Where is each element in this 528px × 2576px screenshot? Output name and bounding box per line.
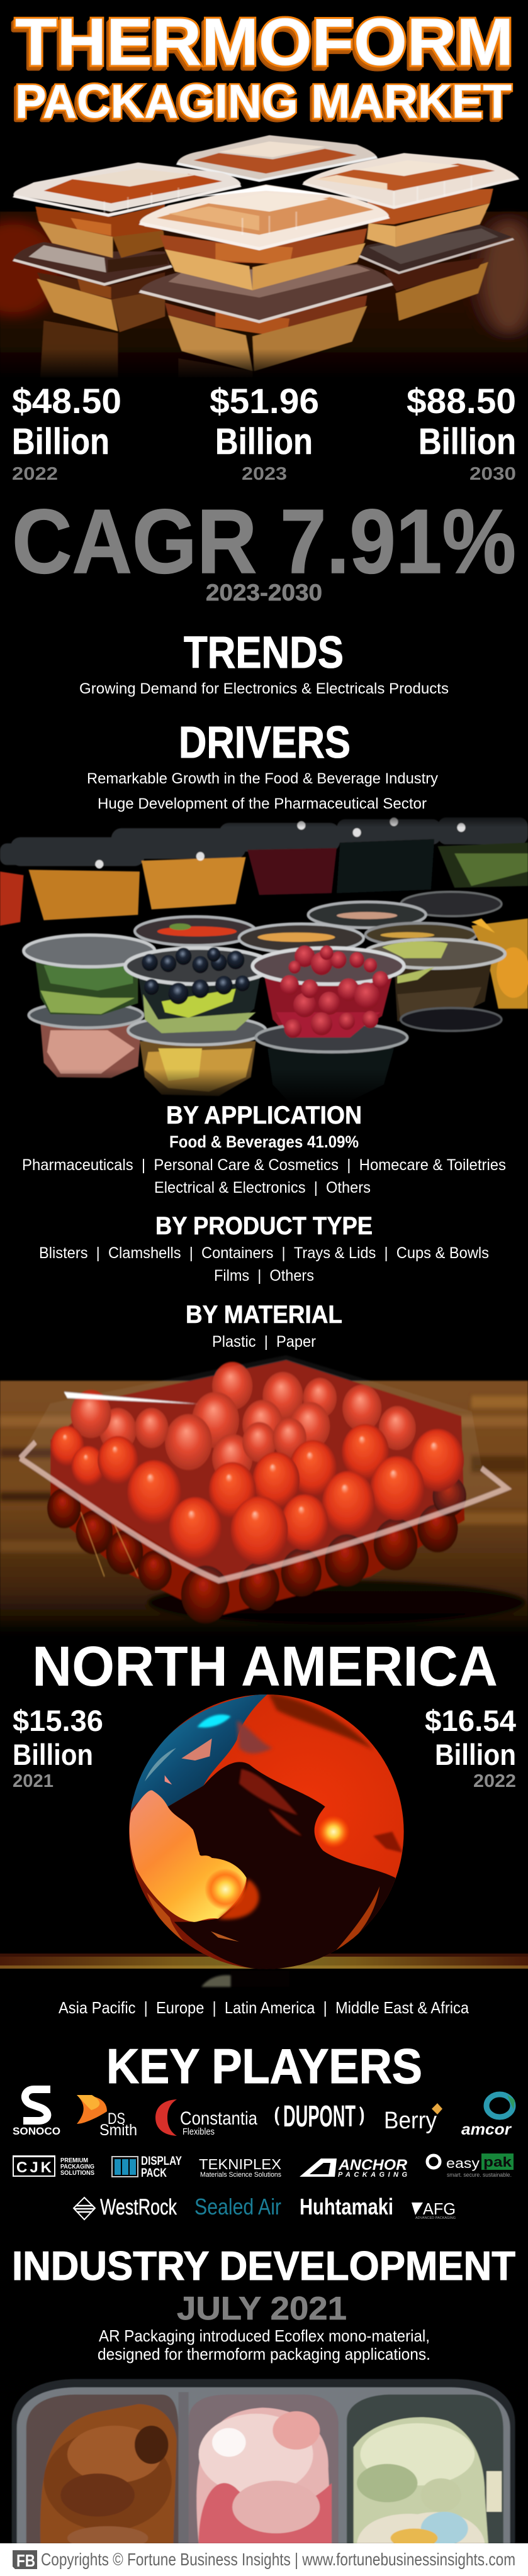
heading: industry development: INDUSTRY DEVELOPMENT — [12, 2243, 515, 2289]
logo: Display Pack: DISPLAY — [141, 2155, 182, 2168]
title line: THERMOFORM: THERMOFORM — [13, 9, 511, 83]
market value 2023: 2023 — [242, 464, 287, 484]
left lower container — [13, 242, 172, 332]
logo: Amcor: amcor — [461, 2121, 512, 2138]
market value 2022: 2022 — [12, 464, 58, 484]
logo: AFG Advanced Packaging — [412, 2199, 456, 2220]
logo: Anchor Packaging — [300, 2157, 408, 2179]
market value 2030: Billion — [418, 421, 516, 462]
logo: Easypak: easy — [446, 2155, 480, 2171]
upper dark rim — [269, 1693, 373, 1750]
logo: Berry: Berry — [384, 2108, 437, 2134]
footer bar — [0, 2543, 528, 2576]
heading: north america: NORTH AMERICA — [32, 1635, 498, 1698]
left upper container — [13, 162, 241, 258]
material list: Plastic | Paper — [212, 1333, 316, 1351]
logo: Constantia Flexibles: Constantia — [180, 2108, 257, 2129]
north america value 2021 — [13, 1704, 103, 1791]
development text: designed for thermoform packaging applications. — [98, 2345, 430, 2363]
north america value 2022: Billion — [435, 1738, 516, 1771]
drivers text — [87, 770, 438, 812]
title — [13, 5, 514, 130]
application list — [22, 1156, 506, 1197]
logo: Sonoco: SONOCO — [13, 2125, 60, 2137]
photo: thermoform cups with food — [0, 810, 528, 1104]
market value 2022 — [12, 381, 121, 484]
north america value 2021: Billion — [13, 1738, 93, 1771]
strawberry scoop — [196, 2407, 332, 2543]
trends text: Growing Demand for Electronics & Electricals Products — [79, 680, 449, 697]
logo: Tekniplex: Materials Science Solutions — [200, 2171, 281, 2179]
product type list: Blisters | Clamshells | Containers | Trays & Lids | Cups & Bowls — [39, 1244, 489, 1262]
logo: Easypak: smart. secure. sustainable. — [447, 2172, 512, 2179]
logo: CJK Premium Packaging Solutions — [13, 2155, 94, 2177]
title line: PACKAGING MARKET: PACKAGING MARKET — [13, 77, 509, 130]
development date: JULY 2021 — [177, 2291, 347, 2327]
blueberry bowl — [138, 973, 261, 1033]
logo: WestRock: WestRock — [100, 2195, 177, 2219]
heading: by material: BY MATERIAL — [186, 1301, 342, 1329]
heading: trends: TRENDS — [184, 628, 344, 678]
logo: Sonoco — [13, 2089, 60, 2137]
market value 2022: $48.50 — [12, 381, 121, 421]
north america value 2021: 2021 — [13, 1771, 53, 1791]
market value 2022: Billion — [12, 421, 110, 462]
product type list: Films | Others — [214, 1267, 314, 1285]
logo: DuPont: DUPONT — [283, 2100, 356, 2133]
north america value 2022: 2022 — [473, 1771, 516, 1791]
market value 2023: $51.96 — [210, 381, 319, 421]
tub under blueberries — [140, 1041, 256, 1096]
market value 2030 — [407, 381, 516, 484]
logo: Constantia Flexibles: Flexibles — [183, 2126, 215, 2137]
chocolate scoop — [40, 2404, 177, 2543]
application list: Pharmaceuticals | Personal Care & Cosmetics | Homecare & Toiletries — [22, 1156, 506, 1174]
logo: CJK Premium Packaging Solutions: PACKAGING — [60, 2164, 94, 2170]
development text: AR Packaging introduced Ecoflex mono-material, — [99, 2326, 430, 2345]
segment: by product type — [39, 1212, 489, 1285]
segment: by application — [22, 1102, 506, 1197]
logo: Easypak: pak — [483, 2154, 512, 2170]
tub under raspberries — [267, 1048, 394, 1102]
logo: WestRock — [74, 2195, 177, 2219]
development text — [98, 2326, 430, 2363]
logo: Tekniplex: TEKNIPLEX — [199, 2156, 281, 2172]
globe — [128, 1693, 404, 1987]
dark middle of the globe — [168, 1762, 395, 1970]
title line: PACKAGING MARKET: PACKAGING MARKET — [15, 75, 512, 128]
logo: Amcor — [461, 2094, 515, 2138]
logo: Easypak — [427, 2153, 514, 2179]
north america value 2021: $15.36 — [13, 1704, 103, 1737]
logo: CJK Premium Packaging Solutions: PREMIUM — [60, 2157, 88, 2164]
CAGR period: 2023-2030 — [206, 580, 322, 605]
market value 2023: Billion — [215, 421, 313, 462]
photo: ice cream in a three-compartment tray — [12, 2379, 515, 2550]
photo: cherry tomatoes in a clamshell — [0, 1356, 528, 1642]
footer logo: FB — [16, 2551, 35, 2570]
right upper container — [303, 153, 519, 247]
market value 2023 — [210, 381, 319, 484]
drivers text: Remarkable Growth in the Food & Beverage Industry — [87, 770, 438, 787]
other regions list: Asia Pacific | Europe | Latin America | Middle East & Africa — [59, 1998, 469, 2017]
logo: CJK Premium Packaging Solutions: SOLUTIONS — [60, 2170, 94, 2177]
market value 2030: $88.50 — [407, 381, 516, 421]
title line: PACKAGING MARKET: PACKAGING MARKET — [15, 75, 512, 128]
logo: DS Smith: Smith — [99, 2121, 137, 2139]
ocean with cyan highlight — [128, 1693, 269, 1815]
middle row bowls — [401, 892, 502, 916]
globe stand — [231, 1971, 289, 1987]
highlighted segment share: Food & Beverages 41.09% — [169, 1132, 359, 1151]
logo: Display Pack — [112, 2155, 182, 2180]
product type list — [39, 1244, 489, 1285]
heading: by application: BY APPLICATION — [166, 1102, 362, 1129]
logo: AFG Advanced Packaging: ADVANCED PACKAGING — [415, 2216, 456, 2220]
rim crescents — [147, 1893, 184, 1942]
logo: Sealed Air: Sealed Air — [194, 2194, 281, 2219]
logo: Huhtamaki: Huhtamaki — [300, 2194, 393, 2219]
title line: PACKAGING MARKET: PACKAGING MARKET — [14, 76, 510, 129]
logo: AFG Advanced Packaging: AFG — [423, 2199, 456, 2218]
hero image: stacked thermoform food containers — [0, 135, 528, 380]
glowing continent — [130, 1790, 247, 1922]
heading: drivers: DRIVERS — [179, 718, 351, 768]
market value 2030: 2030 — [469, 464, 516, 484]
logo: DS Smith: DS — [108, 2110, 125, 2128]
center upper container — [140, 184, 389, 290]
heading: key players: KEY PLAYERS — [106, 2038, 422, 2094]
title line: THERMOFORM: THERMOFORM — [15, 5, 514, 79]
logo: Constantia Flexibles — [155, 2099, 257, 2137]
lower left tub — [40, 1023, 142, 1078]
title line: THERMOFORM: THERMOFORM — [14, 8, 512, 82]
north america value 2022: $16.54 — [425, 1704, 516, 1737]
raspberry bowl — [264, 976, 392, 1037]
logo: Anchor Packaging: PACKAGING — [338, 2171, 407, 2179]
heading: by product type: BY PRODUCT TYPE — [155, 1212, 373, 1240]
center lower container — [140, 264, 392, 371]
horizon band behind the globe — [0, 1954, 528, 1969]
application list: Electrical & Electronics | Others — [154, 1179, 371, 1197]
pistachio scoop — [354, 2417, 488, 2543]
logo: Display Pack: PACK — [141, 2167, 167, 2180]
logo: Tekniplex — [199, 2156, 281, 2179]
logo: DuPont — [276, 2100, 363, 2133]
back container — [177, 135, 377, 180]
salad bowl — [35, 960, 138, 1015]
drivers text: Huge Development of the Pharmaceutical Sector — [98, 795, 427, 812]
logo: Anchor Packaging: ANCHOR — [338, 2157, 408, 2174]
title line: THERMOFORM: THERMOFORM — [15, 5, 514, 79]
logo: DS Smith — [77, 2095, 137, 2139]
right lower container — [359, 224, 514, 321]
logo: CJK Premium Packaging Solutions: CJK — [16, 2159, 52, 2176]
north america value 2022 — [425, 1704, 516, 1791]
back row lids — [0, 817, 528, 866]
segment: by material — [186, 1301, 342, 1351]
right bowl — [394, 962, 491, 1021]
